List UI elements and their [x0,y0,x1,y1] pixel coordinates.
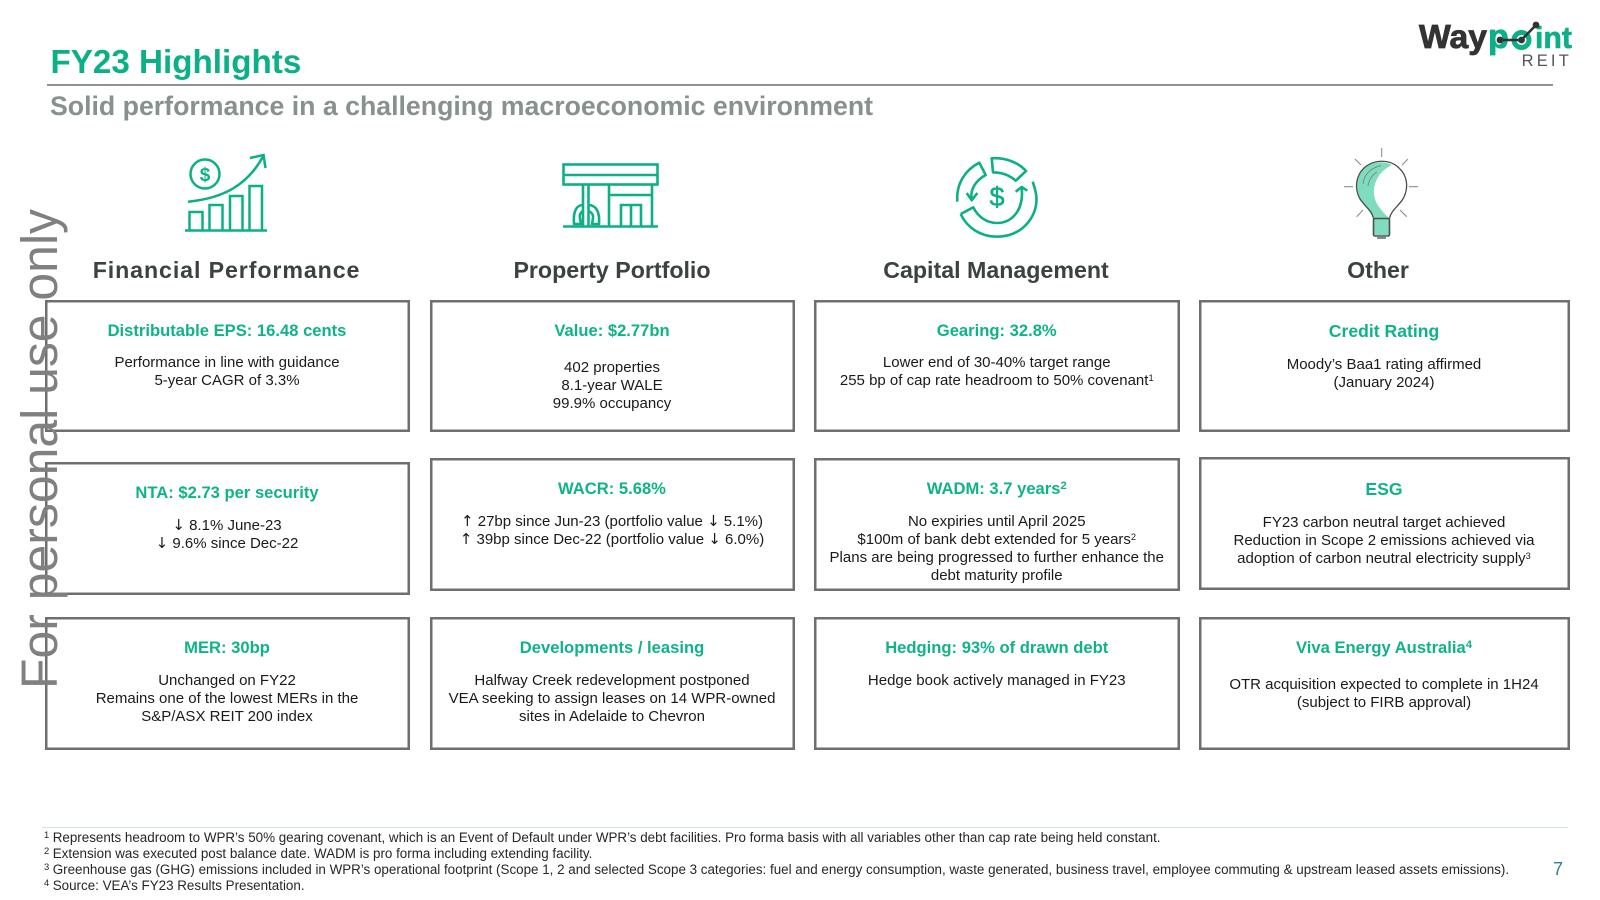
panel text: No expiries until April 2025 [908,512,1086,530]
footnotes [44,830,1509,892]
logo: Waypoint REIT: int [1535,20,1572,55]
panel heading: Developments / leasing [520,638,704,657]
heading: Capital Management: Capital Management [883,257,1109,283]
heading: Financial Performance: Financial Performance [93,257,360,283]
panel text: (January 2024) [1334,374,1434,390]
title: FY23 Highlights [50,44,301,81]
panel text: Halfway Creek redevelopment postponed [474,672,750,689]
panel: Viva Energy Australia [1198,617,1570,750]
panel: Gearing [814,300,1180,432]
panel text: 8.1-year WALE [561,376,663,394]
panel text: adoption of carbon neutral electricity supply3 [1237,550,1531,566]
panel: Developments / leasing [430,617,794,750]
panel text: Performance in line with guidance [114,354,340,371]
panel text [1287,356,1481,390]
icon: capital cycle: $ [989,182,1005,212]
panel text: FY23 carbon neutral target achieved [1263,514,1505,530]
panel text: Reduction in Scope 2 emissions achieved via [1233,532,1534,548]
panel: WACR [430,458,794,591]
panel heading: WACR: 5.68% [558,479,666,498]
panel heading: Viva Energy Australia4 [1296,638,1472,657]
panel: MER [44,617,410,750]
panel text: ↑ 27bp since Jun-23 (portfolio value ↓ 5.1%) [461,512,763,530]
panel text [553,358,672,412]
panel: ESG [1198,457,1570,590]
panel text [1233,514,1534,566]
panel text: VEA seeking to assign leases on 14 WPR-owned [449,690,775,707]
footnote 4: 4 Source: VEA’s FY23 Results Presentation. [44,878,305,892]
panel text: ↑ 39bp since Dec-22 (portfolio value ↓ 6.0%) [460,530,764,548]
header rule [47,84,1553,86]
panel heading: Hedging: 93% of drawn debt [885,638,1108,657]
logo: Waypoint REIT: REIT [1522,52,1572,70]
panel text: Lower end of 30-40% target range [883,354,1111,371]
panel text [1229,676,1539,711]
logo: Waypoint REIT: p [1488,18,1509,56]
panel text: (subject to FIRB approval) [1297,694,1471,711]
panel text: ↓ 9.6% since Dec-22 [156,534,298,552]
page number: 7 [1553,859,1563,879]
panel: Value [430,300,794,432]
panel text [460,512,764,548]
panel: Distributable EPS [44,300,410,432]
logo: Waypoint REIT: Way [1419,18,1488,55]
panel text [156,516,298,552]
footnote 3: 3 Greenhouse gas (GHG) emissions included in WPR’s operational footprint (Scope 1, 2 and selected Scope 3 categories: fuel and energy consumption, waste generated, business travel, employee commuting & upstream leased assets emissions). [44,862,1509,877]
panel text [96,672,358,725]
panel text: 255 bp of cap rate headroom to 50% covenant1 [840,372,1154,389]
panel heading: ESG [1365,478,1403,498]
panel: Credit Rating [1198,300,1570,432]
panel heading: Value: $2.77bn [554,321,670,340]
panel heading: Credit Rating [1329,321,1439,341]
panel text: ↓ 8.1% June-23 [172,516,282,534]
subtitle: Solid performance in a challenging macroeconomic environment [50,91,873,121]
panel heading: MER: 30bp [184,638,270,657]
panel text [830,512,1164,584]
panel text [114,354,340,389]
icon: financial performance chart: $ [200,165,211,186]
panel heading: Gearing: 32.8% [937,321,1057,340]
footnote rule [42,826,1568,828]
panel text: 5-year CAGR of 3.3% [154,372,300,389]
panel heading: NTA: $2.73 per security [135,483,319,502]
panel text: Hedge book actively managed in FY23 [868,672,1126,689]
heading: Property Portfolio: Property Portfolio [513,257,711,283]
panel text [448,672,775,725]
panel text: debt maturity profile [931,566,1063,584]
panel text: Plans are being progressed to further enhance the [830,548,1164,566]
panel text: 99.9% occupancy [553,394,671,412]
panel text: Moody’s Baa1 rating affirmed [1287,356,1481,372]
panel text [840,354,1154,389]
panel heading: Distributable EPS: 16.48 cents [108,321,346,340]
heading: Other: Other [1347,257,1409,283]
panel text: S&P/ASX REIT 200 index [141,708,313,725]
panel: WADM [814,458,1180,591]
watermark: For personal use only: For personal use only [11,209,68,689]
panel text: 402 properties [564,358,660,376]
panel text: OTR acquisition expected to complete in 1H24 [1229,676,1539,693]
footnote 1: 1 Represents headroom to WPR’s 50% gearing covenant, which is an Event of Default under WPR’s debt facilities. Pro forma basis with all variables other than cap rate being held constant. [44,830,1161,845]
panel text: sites in Adelaide to Chevron [519,708,705,725]
panel: Hedging [814,617,1180,750]
panel heading: WADM: 3.7 years2 [927,479,1067,498]
footnote 2: 2 Extension was executed post balance date. WADM is pro forma including extending facility. [44,846,592,861]
panel text: Remains one of the lowest MERs in the [96,690,358,707]
panel text: Unchanged on FY22 [158,672,296,689]
panel text: $100m of bank debt extended for 5 years2 [857,530,1136,548]
panel: NTA [44,462,410,595]
